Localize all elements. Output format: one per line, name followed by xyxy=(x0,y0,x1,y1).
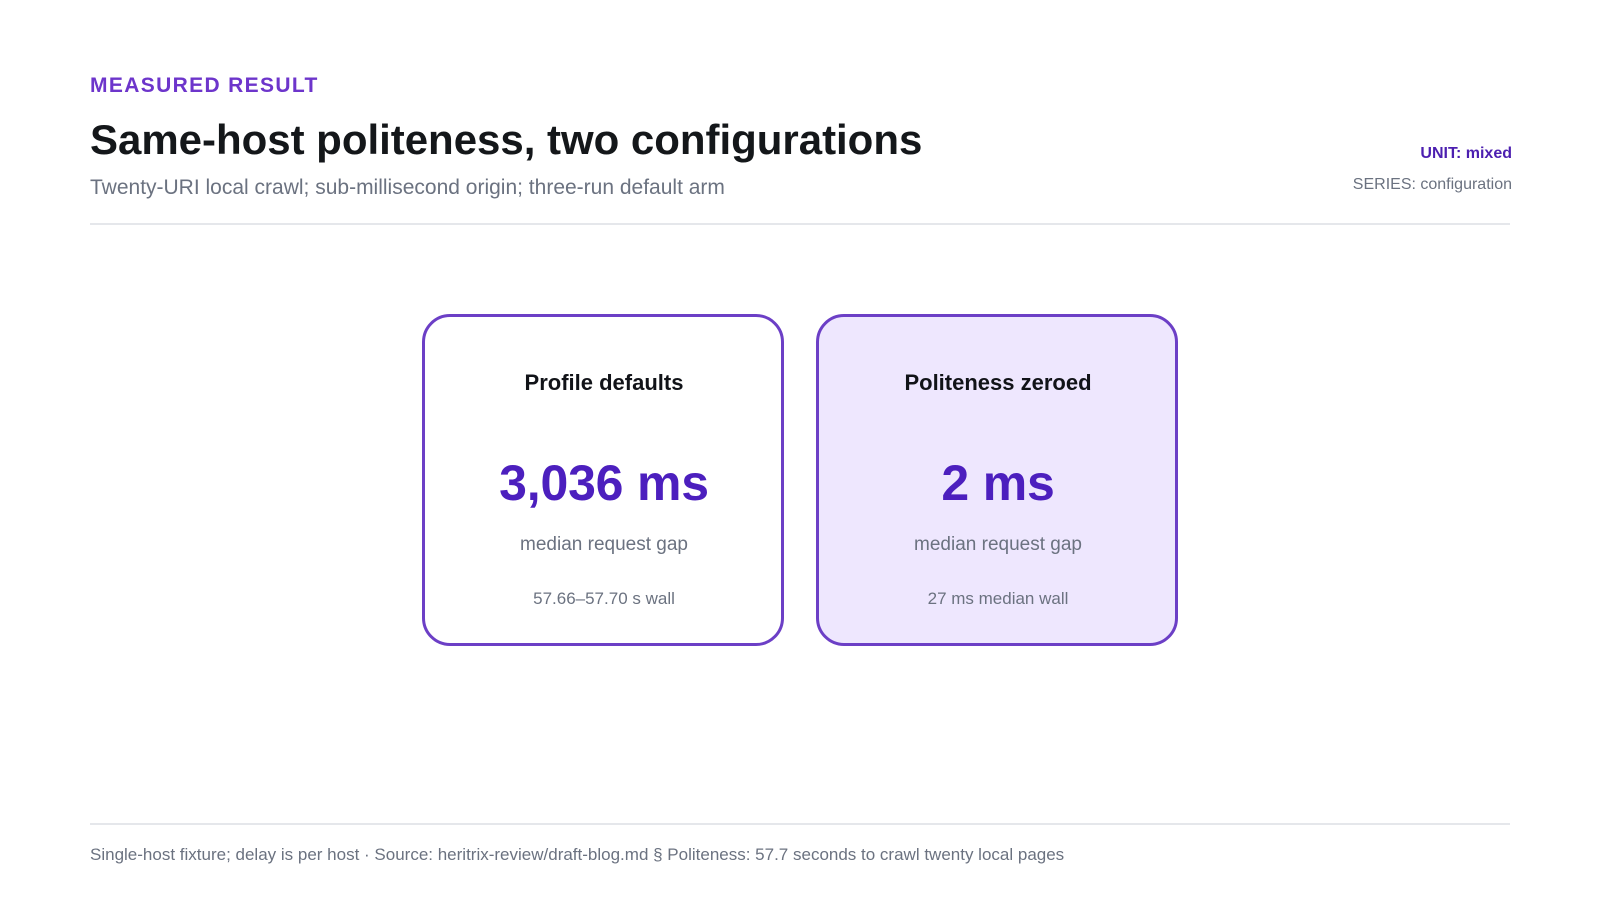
title: Same-host politeness, two configurations xyxy=(90,116,922,163)
panel: profile defaults xyxy=(422,314,784,646)
eyebrow label: MEASURED RESULT xyxy=(90,74,319,97)
metric value: 2 ms xyxy=(941,455,1055,511)
series label: SERIES: configuration xyxy=(1353,176,1512,193)
subtitle: Twenty-URI local crawl; sub-millisecond origin; three-run default arm xyxy=(90,176,725,199)
wall time note: 27 ms median wall xyxy=(928,589,1068,608)
card heading: Politeness zeroed xyxy=(904,370,1092,395)
footer source note: Single-host fixture; delay is per host · Source: heritrix-review/draft-blog.md § Politeness: 57.7 seconds to crawl twenty local pages xyxy=(90,845,1064,864)
wall time note: 57.66–57.70 s wall xyxy=(533,589,675,608)
card heading: Profile defaults xyxy=(525,370,683,395)
metric label: median request gap xyxy=(520,534,688,555)
metric value: 3,036 ms xyxy=(499,455,709,511)
metric label: median request gap xyxy=(914,534,1082,555)
unit label: UNIT: mixed xyxy=(1420,145,1512,162)
panel: politeness zeroed xyxy=(816,314,1178,646)
